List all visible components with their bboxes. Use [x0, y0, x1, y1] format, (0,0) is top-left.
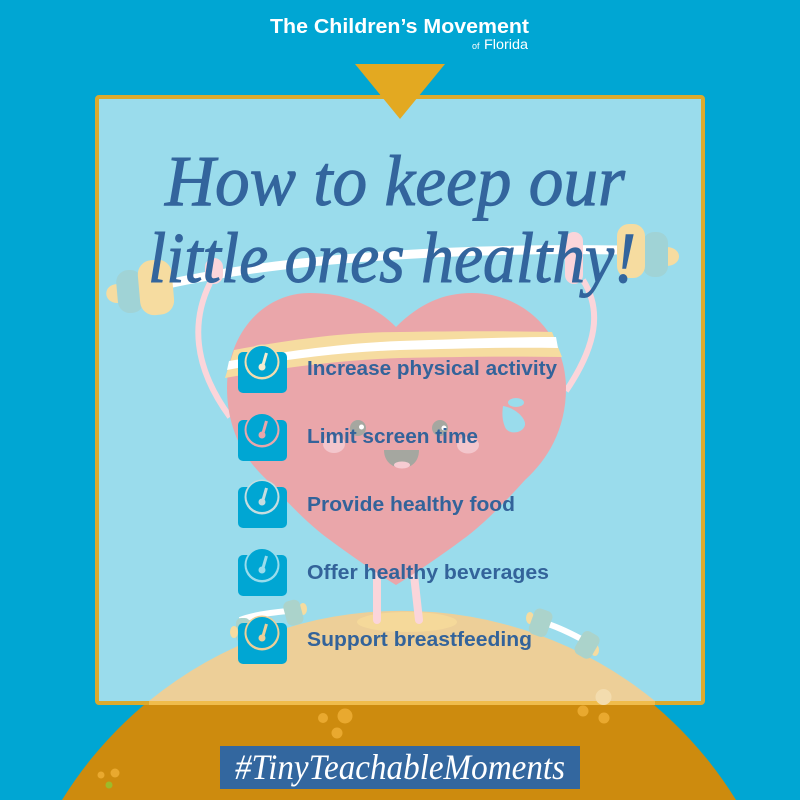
cheeks — [323, 435, 479, 454]
hill outside panel — [62, 612, 736, 800]
left dumbbell — [230, 598, 307, 642]
title — [148, 141, 636, 298]
item: offer healthy beverages: Offer healthy beverages — [307, 562, 549, 584]
title: How to keep our — [164, 141, 626, 221]
item: increase physical activity: Increase physical activity — [307, 358, 558, 380]
logo: The Children’s Movement — [270, 15, 529, 38]
character illustration — [106, 224, 679, 701]
sweat drop — [502, 398, 525, 432]
pointer triangle — [355, 64, 445, 119]
item: limit screen time — [238, 412, 478, 461]
barbell — [106, 224, 679, 316]
right dumbbell — [526, 607, 602, 661]
hill highlight — [596, 689, 612, 705]
heart — [227, 293, 566, 585]
item: provide healthy food — [238, 480, 515, 528]
title: little ones healthy! — [148, 218, 636, 298]
item: increase physical activity — [238, 344, 558, 393]
logo — [270, 15, 529, 52]
logo: Florida — [484, 37, 529, 52]
item: provide healthy food: Provide healthy food — [307, 494, 515, 516]
left arm — [198, 283, 230, 417]
panel — [97, 97, 703, 703]
item: limit screen time: Limit screen time — [307, 426, 478, 448]
checklist — [238, 344, 558, 664]
feet shadow — [357, 612, 457, 632]
logo: of — [472, 41, 480, 51]
legs — [377, 575, 419, 620]
headband — [225, 331, 562, 378]
hill inside panel — [149, 611, 655, 701]
item: offer healthy beverages — [238, 548, 549, 596]
hashtag banner: #TinyTeachableMoments — [235, 747, 565, 787]
item: support breastfeeding — [238, 616, 532, 664]
right arm — [566, 280, 594, 391]
eyes — [350, 420, 448, 436]
mouth — [384, 450, 419, 468]
item: support breastfeeding: Support breastfeeding — [307, 629, 532, 651]
panel bottom edge over hill — [149, 701, 655, 705]
